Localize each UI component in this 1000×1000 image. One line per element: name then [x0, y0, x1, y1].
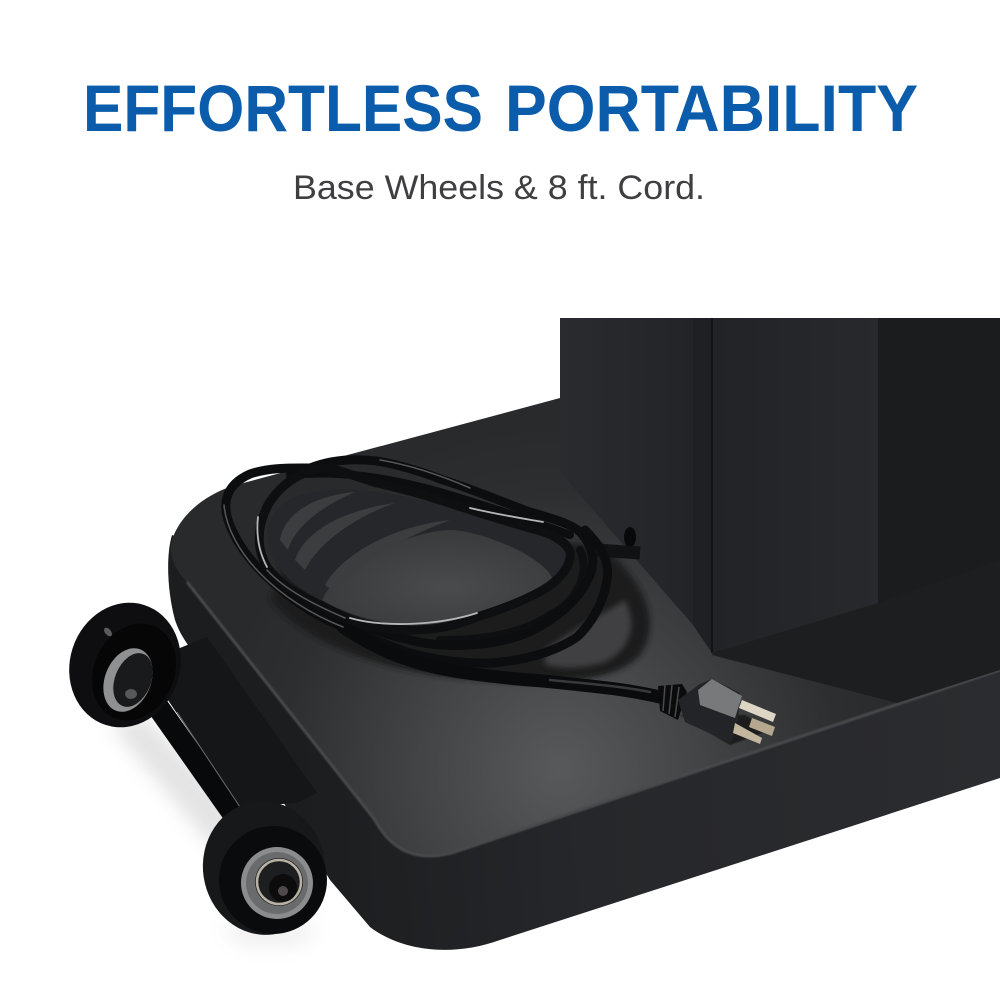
plug body [678, 679, 740, 743]
base side wall [168, 535, 1000, 950]
title: PORTABILITY [505, 71, 918, 145]
lit floor patch beyond cord [545, 600, 631, 668]
lower blade [733, 723, 762, 744]
base front edge highlight [187, 582, 1000, 856]
axle [146, 690, 232, 812]
column right face [878, 318, 1000, 603]
title: EFFORTLESS [83, 71, 483, 145]
plug shadow [680, 715, 770, 745]
cord entering port [597, 550, 640, 553]
power plug [658, 679, 776, 745]
power cord [224, 460, 660, 697]
base top surface [171, 398, 1000, 856]
wheel: left [53, 588, 197, 742]
column cord port [624, 527, 636, 547]
shadow of column on base [712, 500, 1000, 703]
product: stand base with wheels and cord [53, 318, 1000, 950]
floor stripes inside loop [280, 492, 450, 592]
column bevel [693, 318, 712, 653]
ground pin [739, 700, 776, 722]
cord shadow on base [270, 520, 650, 682]
bracket edge glint [177, 712, 240, 807]
plug collar [698, 679, 742, 718]
column left face [560, 318, 693, 625]
wheel bracket [143, 637, 317, 807]
wheel: right [194, 793, 334, 943]
ground shadow [110, 715, 320, 945]
subtitle: Base Wheels & 8 ft. Cord. [293, 169, 705, 207]
column [560, 318, 1000, 653]
floor inside cord loop [267, 489, 567, 623]
upper blade [749, 718, 775, 736]
column middle face [712, 318, 878, 653]
plug strain relief [658, 684, 687, 720]
